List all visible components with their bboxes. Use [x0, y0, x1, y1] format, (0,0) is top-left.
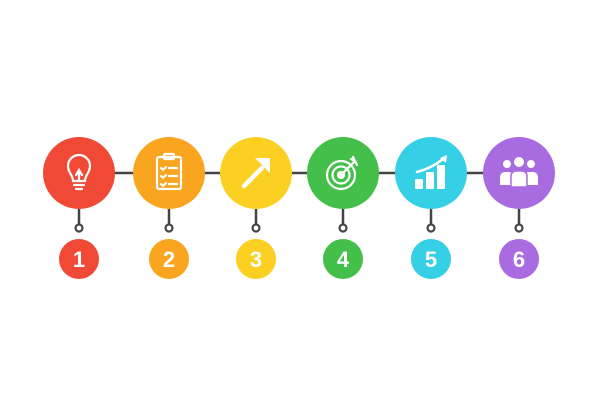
step 1 — [43, 137, 115, 279]
step 1: 1 — [73, 247, 85, 272]
step 6 — [483, 137, 555, 279]
step 5 — [395, 137, 467, 279]
icon: people group — [500, 157, 538, 187]
icon: target — [327, 157, 357, 189]
step 5: 5 — [425, 247, 437, 272]
step 3 — [220, 137, 292, 279]
icon: arrow — [244, 158, 270, 186]
step 6: 6 — [513, 247, 525, 272]
step 4: 4 — [337, 247, 350, 272]
step 2: 2 — [163, 247, 175, 272]
icon: light bulb — [68, 155, 90, 189]
step 2 — [133, 137, 205, 279]
step 3: 3 — [250, 247, 262, 272]
step 4 — [307, 137, 379, 279]
icon: growth chart — [415, 155, 447, 189]
icon: clipboard — [157, 154, 181, 189]
connector line — [79, 172, 519, 174]
